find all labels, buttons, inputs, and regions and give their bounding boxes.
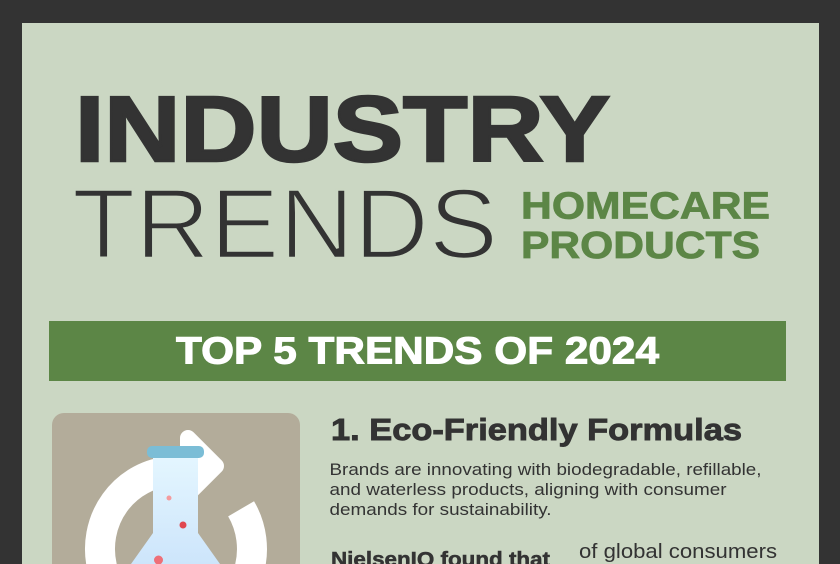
text block: trend 1 description: and waterless products, aligning with consumer [330,481,727,499]
title: INDUSTRY: INDUSTRY [75,77,610,181]
text block: trend 1 description [330,461,762,519]
banner: top 5 trends: TOP 5 TRENDS OF 2024 [176,330,659,372]
heading: trend 1: 1. Eco-Friendly Formulas [331,412,742,447]
icon: recycling flask [100,438,252,564]
panel: icon card [52,413,300,564]
subtitle: homecare products [521,186,770,267]
icon: flask body [131,456,220,564]
icon: bubbles [154,496,186,564]
title: TRENDS: TRENDS [72,168,498,279]
icon: flask lid [147,446,204,458]
text block: trend 1 description: Brands are innovating with biodegradable, refillable, [330,461,762,479]
icon: circular arrow [100,438,252,564]
subtitle: homecare products: HOMECARE [521,186,770,228]
callout: global consumers text: of global consumers [579,541,777,563]
text block: trend 1 description: demands for sustainability. [330,501,552,519]
subtitle: homecare products: PRODUCTS [521,225,760,267]
banner: top 5 trends [49,321,786,381]
